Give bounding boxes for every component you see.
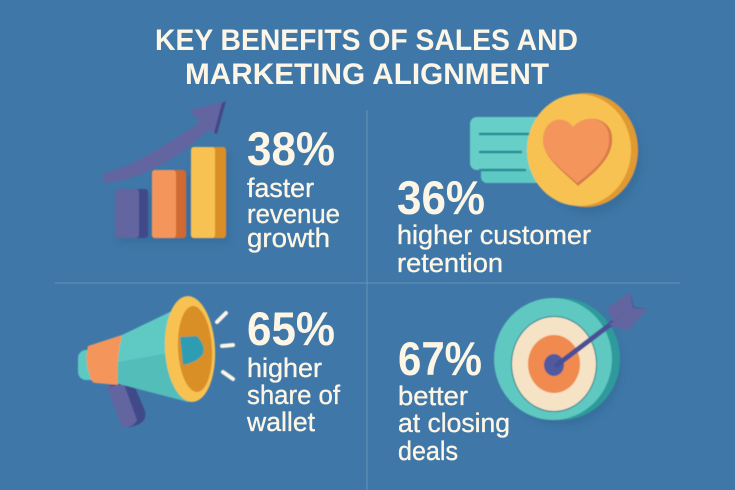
label: faster revenue growth: growth bbox=[247, 223, 330, 253]
title: KEY BENEFITS OF SALES AND bbox=[155, 24, 578, 57]
label: faster revenue growth: faster bbox=[247, 173, 314, 203]
icon: chat bubble and heart coin bbox=[470, 93, 642, 214]
title bbox=[155, 24, 578, 91]
stat: 36%: 36% bbox=[397, 171, 485, 224]
panel: revenue growth bbox=[103, 101, 340, 253]
icon: rising bar chart with arrow bbox=[103, 101, 230, 243]
icon: megaphone bbox=[78, 295, 233, 427]
title: MARKETING ALIGNMENT bbox=[185, 58, 549, 91]
stat: 67%: 67% bbox=[398, 332, 482, 385]
icon: target with arrow bbox=[494, 292, 648, 426]
stat: 65%: 65% bbox=[247, 302, 335, 355]
label: better at closing deals: better bbox=[398, 381, 468, 411]
label: higher customer retention: retention bbox=[397, 248, 503, 278]
label: faster revenue growth bbox=[247, 173, 340, 253]
label: higher share of wallet: wallet bbox=[246, 407, 315, 437]
label: faster revenue growth: revenue bbox=[247, 199, 340, 229]
label: higher customer retention bbox=[397, 220, 591, 278]
label: higher share of wallet bbox=[246, 353, 340, 437]
label: better at closing deals: at closing bbox=[398, 408, 510, 438]
stat: 38%: 38% bbox=[247, 122, 335, 175]
panel: closing deals bbox=[398, 292, 648, 466]
label: better at closing deals bbox=[398, 381, 510, 466]
label: higher share of wallet: higher bbox=[247, 353, 322, 383]
label: higher customer retention: higher customer bbox=[397, 220, 591, 250]
panel: customer retention bbox=[397, 93, 642, 278]
label: better at closing deals: deals bbox=[398, 436, 458, 466]
label: higher share of wallet: share of bbox=[247, 380, 340, 410]
panel: share of wallet bbox=[78, 295, 340, 437]
